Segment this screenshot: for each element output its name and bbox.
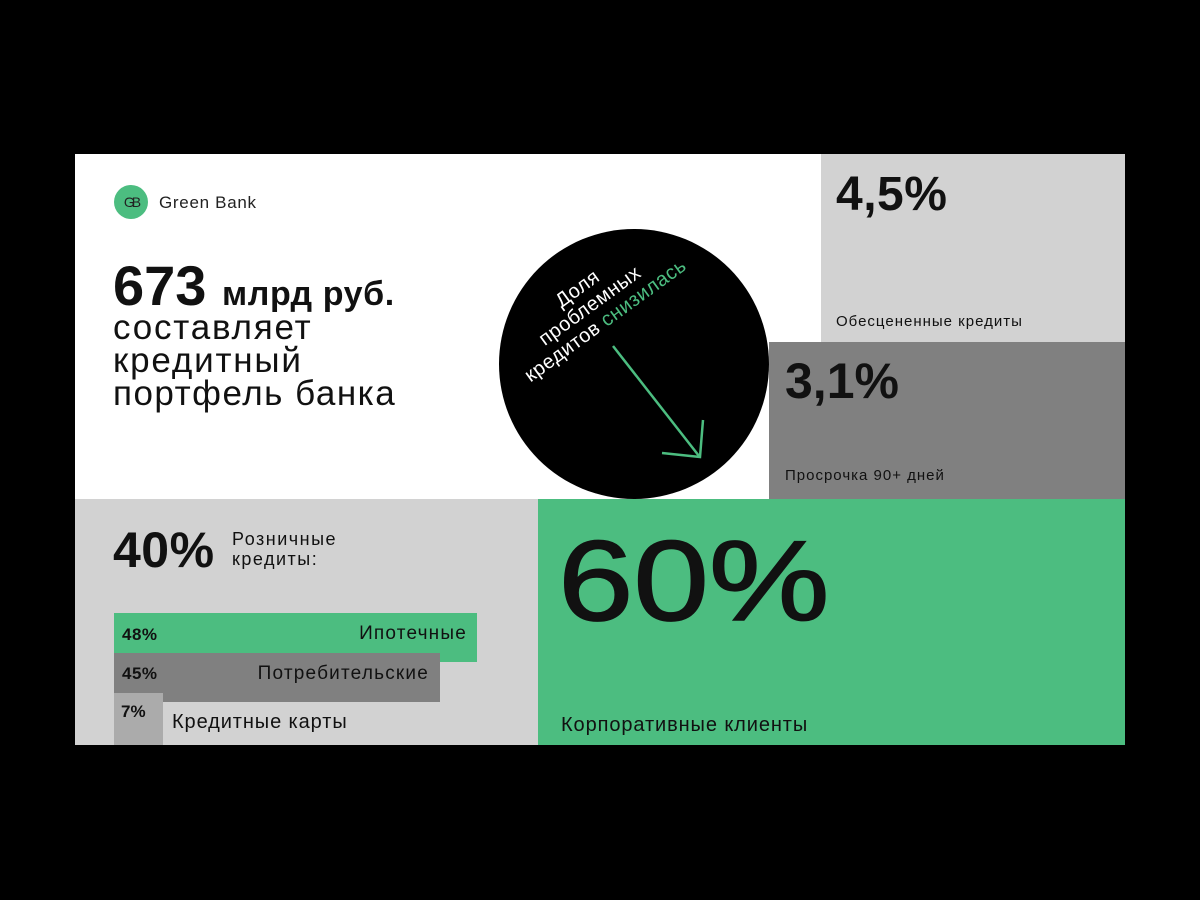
bar: mortgage: 48% <box>122 625 158 644</box>
bar: mortgage: Ипотечные <box>359 623 467 644</box>
icon: GB circle <box>114 185 148 219</box>
bar: credit cards <box>114 693 163 745</box>
callout text: проблемных <box>535 262 645 350</box>
label retail: Розничные <box>232 529 337 549</box>
label retail <box>232 529 337 569</box>
headline text block: составляет <box>113 308 312 347</box>
logo <box>114 185 257 219</box>
callout text: Доля <box>551 266 604 312</box>
panel: retail loans <box>75 499 538 745</box>
label credit cards: Кредитные карты <box>172 711 348 733</box>
card background <box>75 154 1125 745</box>
bar: consumer <box>114 653 440 702</box>
stat 4,5%: 4,5% <box>836 168 947 221</box>
panel: overdue 90+ <box>769 342 1125 499</box>
callout text: кредитов снизилась <box>520 255 691 387</box>
stat 3,1%: 3,1% <box>785 353 899 409</box>
icon: GB circle: GB <box>124 194 138 210</box>
bar: consumer: 45% <box>122 664 158 683</box>
stat 60%: 60% <box>558 518 830 645</box>
bar: consumer: Потребительские <box>258 663 429 684</box>
headline text block: 673 млрд руб. <box>113 254 395 317</box>
label retail: кредиты: <box>232 549 318 569</box>
panel: corporate <box>538 499 1125 745</box>
label impaired: Обесцененные кредиты <box>836 313 1023 330</box>
label overdue: Просрочка 90+ дней <box>785 467 945 484</box>
headline text block: портфель банка <box>113 374 396 413</box>
bar: mortgage <box>114 613 477 662</box>
bar: credit cards: 7% <box>121 702 146 721</box>
brand name: Green Bank <box>159 193 257 212</box>
stat 40%: 40% <box>113 522 215 578</box>
headline text block: кредитный <box>113 341 303 380</box>
arrow down <box>613 346 703 457</box>
panel: impaired loans <box>821 154 1125 342</box>
callout text <box>496 221 691 387</box>
label corporate: Корпоративные клиенты <box>561 714 808 736</box>
headline text block <box>113 254 396 413</box>
